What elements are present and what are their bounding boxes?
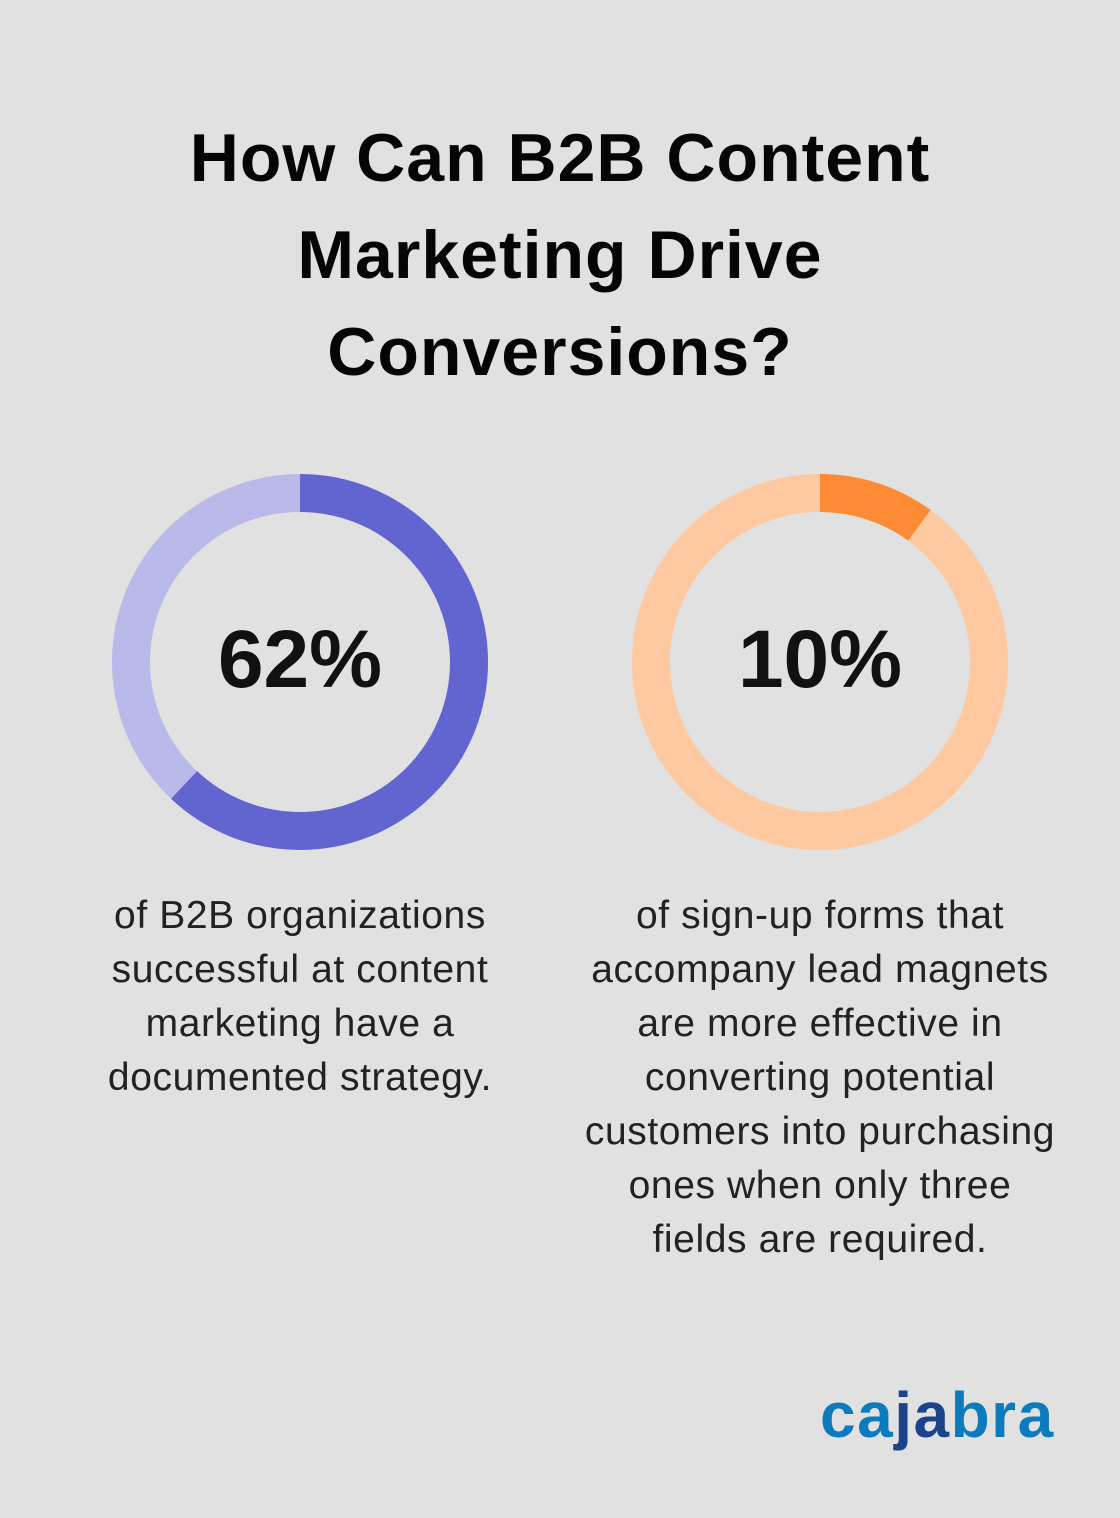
text: left description [108, 894, 492, 1099]
text: left description: of B2B organizations [114, 894, 486, 937]
donut: 10% [632, 474, 1008, 850]
text: left description: successful at content [112, 948, 488, 991]
stat: 10%: 10% [738, 614, 902, 705]
text: right description: are more effective in [637, 1002, 1003, 1045]
text: left description: marketing have a [146, 1002, 454, 1045]
text: right description: ones when only three [629, 1164, 1011, 1207]
title: Conversions? [327, 314, 793, 390]
logo: cajabra [820, 1379, 1055, 1451]
text: right description: fields are required. [652, 1218, 988, 1261]
title: Marketing Drive [297, 217, 823, 293]
title [190, 120, 930, 390]
text: right description: converting potential [645, 1056, 995, 1099]
text: right description: of sign-up forms that [636, 894, 1004, 937]
stat: 62%: 62% [218, 614, 382, 705]
title: How Can B2B Content [190, 120, 930, 196]
text: right description: customers into purchasing [585, 1110, 1055, 1153]
text: left description: documented strategy. [108, 1056, 492, 1099]
text: right description: accompany lead magnets [591, 948, 1049, 991]
text: right description [585, 894, 1055, 1261]
donut: 62% [112, 474, 488, 850]
